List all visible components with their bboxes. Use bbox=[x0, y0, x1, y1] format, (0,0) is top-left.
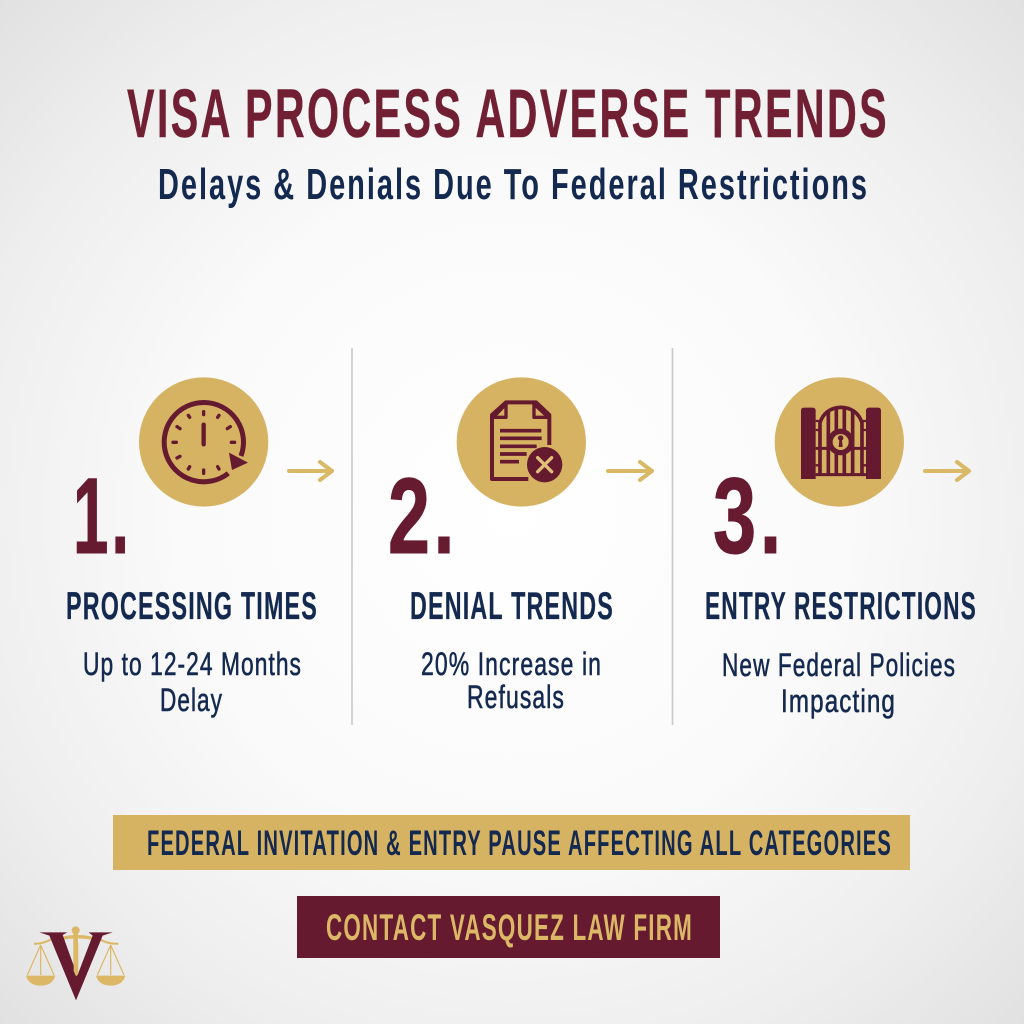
description: Refusals bbox=[467, 679, 565, 715]
heading: PROCESSING TIMES bbox=[66, 585, 318, 628]
heading: DENIAL TRENDS bbox=[410, 585, 614, 628]
arrow bbox=[289, 462, 332, 480]
description bbox=[421, 646, 602, 715]
description: 20% Increase in bbox=[421, 646, 602, 682]
number 2: 2. bbox=[388, 455, 458, 576]
description bbox=[83, 646, 302, 718]
panel: denial trends bbox=[388, 377, 652, 715]
description: Impacting bbox=[781, 683, 896, 719]
number 3: 3. bbox=[713, 455, 785, 576]
icon: locked gate on gold circle bbox=[775, 377, 904, 507]
panel: entry restrictions bbox=[705, 377, 977, 719]
description: Up to 12-24 Months bbox=[83, 646, 302, 682]
logo: V with scales bbox=[26, 926, 125, 1000]
arrow bbox=[608, 462, 652, 480]
panel: processing times bbox=[66, 377, 332, 718]
icon: denied document on gold circle bbox=[457, 377, 586, 507]
number 1: 1. bbox=[73, 455, 132, 576]
call-to-action button bbox=[297, 896, 720, 958]
arrow bbox=[925, 462, 969, 480]
gold banner bbox=[113, 815, 910, 870]
description: Delay bbox=[160, 682, 223, 718]
call-to-action button: CONTACT VASQUEZ LAW FIRM bbox=[326, 907, 693, 948]
description bbox=[722, 647, 956, 719]
icon: clock on gold circle bbox=[139, 377, 268, 507]
